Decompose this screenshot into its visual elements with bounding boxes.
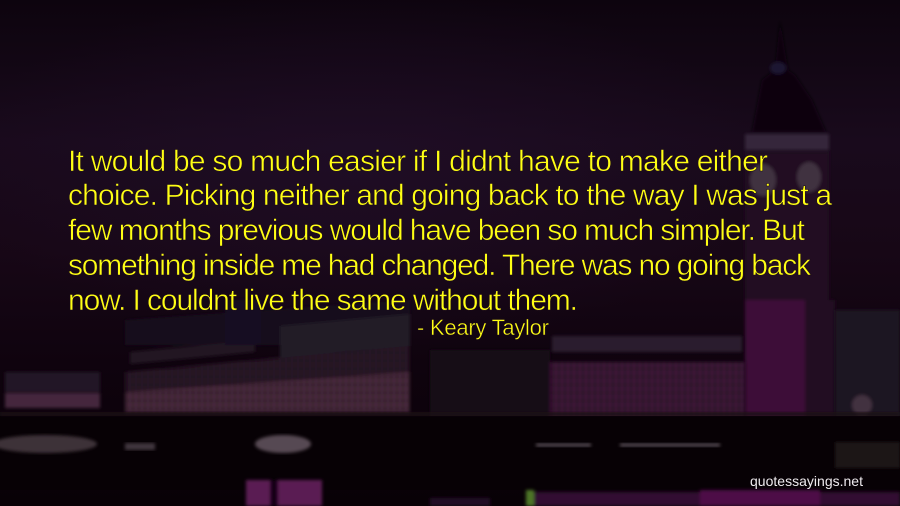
background: Houses of Parliament left wing xyxy=(5,300,410,414)
quote line 1: It would be so much easier if I didnt have to make either xyxy=(68,145,768,178)
quote line 5: now. I couldnt live the same without them. xyxy=(68,284,578,317)
background: Big Ben clock tower xyxy=(745,20,835,425)
quote line 4: something inside me had changed. There was no going back xyxy=(68,249,812,282)
attribution: - Keary Taylor xyxy=(417,315,549,340)
background: Parliament right wing xyxy=(430,310,900,422)
quote text xyxy=(68,145,832,317)
background: Westminster Bridge and river xyxy=(0,412,900,490)
quote line 3: few months previous would have been so much simpler. But xyxy=(68,214,806,247)
quote line 2: choice. Picking neither and going back to the way I was just a xyxy=(68,179,832,212)
watermark: quotessayings.net xyxy=(750,473,863,489)
background: river reflections xyxy=(246,480,900,506)
